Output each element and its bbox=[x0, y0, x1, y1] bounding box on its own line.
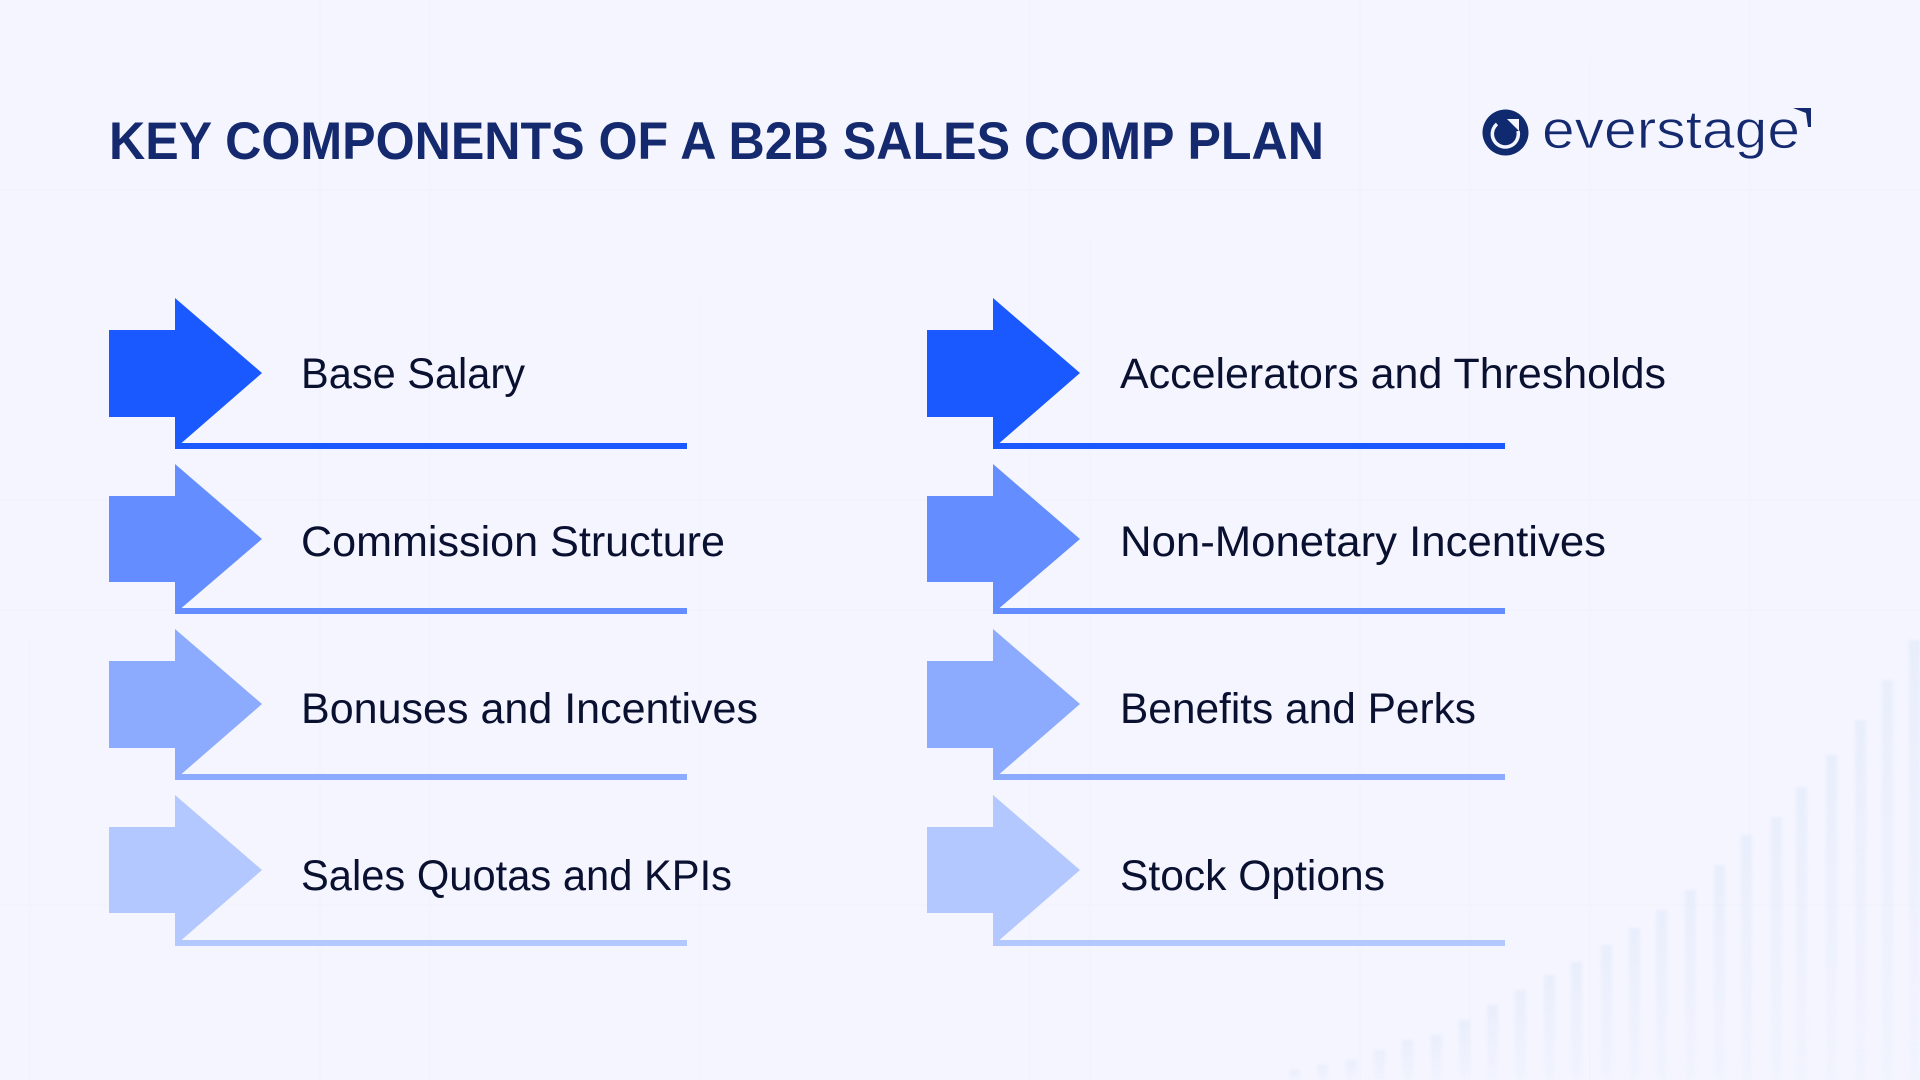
title: KEY COMPONENTS OF A B2B SALES COMP PLAN bbox=[109, 112, 1324, 171]
item: Non-Monetary Incentives bbox=[927, 464, 1606, 614]
icon: logo mark bbox=[1482, 110, 1528, 156]
arrow bbox=[109, 298, 687, 449]
arrow bbox=[927, 298, 1505, 449]
item: Bonuses and Incentives bbox=[109, 629, 758, 780]
item: Sales Quotas and KPIs bbox=[109, 795, 732, 946]
arrow bbox=[927, 464, 1505, 614]
label: Stock Options bbox=[1120, 852, 1385, 900]
everstage logo bbox=[1482, 100, 1811, 160]
item: Commission Structure bbox=[109, 464, 725, 614]
arrow bbox=[109, 464, 687, 614]
label: Base Salary bbox=[301, 350, 525, 398]
label: Benefits and Perks bbox=[1120, 685, 1476, 733]
item: Accelerators and Thresholds bbox=[927, 298, 1666, 449]
icon: logo corner tick bbox=[1793, 108, 1811, 127]
label: Accelerators and Thresholds bbox=[1120, 350, 1666, 398]
item: Stock Options bbox=[927, 795, 1505, 946]
label: Commission Structure bbox=[301, 518, 725, 566]
label: Non-Monetary Incentives bbox=[1120, 518, 1606, 566]
arrow bbox=[109, 629, 687, 780]
item: Base Salary bbox=[109, 298, 687, 449]
background bar chart bbox=[1289, 640, 1920, 1080]
label: Bonuses and Incentives bbox=[301, 685, 758, 733]
logo wordmark: everstage bbox=[1542, 100, 1800, 160]
arrow bbox=[927, 795, 1505, 946]
item: Benefits and Perks bbox=[927, 629, 1505, 780]
label: Sales Quotas and KPIs bbox=[301, 852, 732, 900]
arrow bbox=[927, 629, 1505, 780]
arrow bbox=[109, 795, 687, 946]
